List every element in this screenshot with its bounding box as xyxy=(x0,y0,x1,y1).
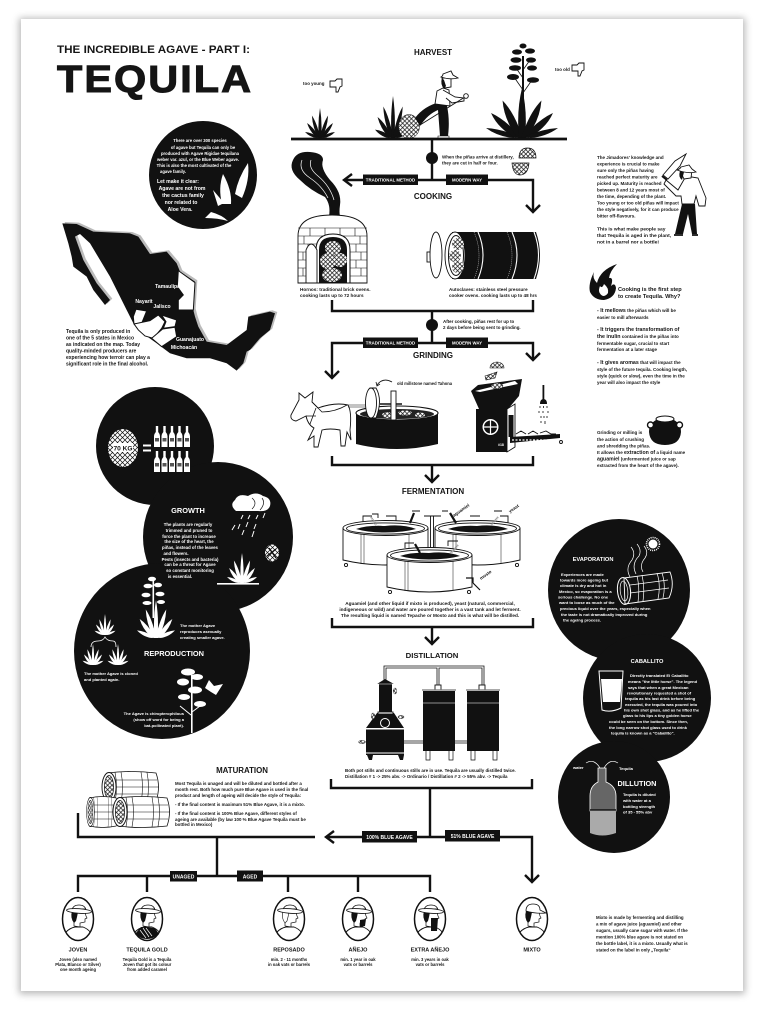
pina halves note: they are cut in half or four. xyxy=(442,160,498,166)
fermentation to distillation flow xyxy=(332,618,533,644)
growth text: Pests (insects and bacteria) xyxy=(162,557,219,562)
portrait: extra anejo xyxy=(411,898,450,967)
oven text: Hornos: traditional brick ovens. xyxy=(300,287,371,292)
jimador text: The Jimadores' knowledge and xyxy=(597,155,664,160)
harvest to cooking flow: MODERN WAY xyxy=(452,178,482,182)
panel: right circles xyxy=(548,519,711,853)
mother agave text: The mother Agave xyxy=(180,623,216,628)
growth text: and flowers. xyxy=(163,551,189,556)
grinding text: extracted from the heart of the agave). xyxy=(597,463,679,468)
caballito text: could be seen on the bottom. Since then, xyxy=(609,719,688,724)
jimador text: that Tequila is aged in the plant, xyxy=(597,233,672,239)
evaporation text: Experiences are made xyxy=(561,572,604,577)
evaporation text: precious liquid over the years, especially when xyxy=(560,606,651,611)
icon: rain cloud xyxy=(232,494,270,537)
jimador text: This is what make people say xyxy=(597,226,666,232)
cooking to grinding flow: TRADITIONAL METHOD xyxy=(366,340,415,346)
icon: shot glass xyxy=(599,671,623,711)
tank labels xyxy=(452,503,520,581)
panel: agave species circle: produced with Agave Rigidae tequilana xyxy=(161,151,240,156)
icon: young agave xyxy=(305,108,335,138)
jimador text: between 8 and 12 years most of xyxy=(597,188,665,192)
icon: donkey xyxy=(291,392,366,447)
tank labels: aguamiel xyxy=(452,503,470,518)
cloned text: and planted again. xyxy=(84,677,120,682)
growth text: can be a threat for Agave xyxy=(164,562,216,567)
portrait: tequila gold: from added caramel xyxy=(127,967,167,972)
mother agave text: creating smaller agave. xyxy=(180,635,225,640)
chiropterophilous text: bat-pollinated plant). xyxy=(144,723,184,728)
growth text: so constant monitoring xyxy=(166,568,214,573)
portrait: extra anejo: min. 3 years in oak xyxy=(411,957,449,962)
text: tequila regions: as indicated on the map. Today xyxy=(66,342,140,348)
portrait: mixto xyxy=(516,898,548,954)
resting note: After cooking, piñas rest for up to xyxy=(443,319,515,324)
too young label xyxy=(303,79,342,92)
mixto text: mention 100% blue agave is not stated on xyxy=(596,934,683,940)
cloned text: The mother Agave is cloned xyxy=(84,671,138,676)
text: tequila regions: Tequila is only produced in xyxy=(66,329,130,335)
cooking reasons: - It triggers the transformation of xyxy=(597,327,680,333)
cooking reasons: the inulin contained in the piñas into xyxy=(597,334,679,340)
portrait: anejo xyxy=(340,898,376,967)
pina halves note: When the piñas arrive at distillery, xyxy=(442,154,514,160)
icon: tahona mill xyxy=(356,380,438,449)
icon: cloned agaves xyxy=(82,614,128,665)
distillation text: Distillation # 1 -> 25% abv. -> Ordinario / Distillation # 2 -> 55% abv. -> Tequila xyxy=(345,774,508,779)
jimador text: experience is crucial to make xyxy=(597,162,660,166)
autoclave text: cooker ovens. cooking lasts up to 48 hrs xyxy=(449,293,537,298)
cooking to grinding flow: MODERN WAY xyxy=(452,340,482,346)
growth text: piñas, instead of the leaves xyxy=(162,545,219,550)
portrait: tequila gold xyxy=(123,898,172,972)
jimador text: the time, depending of the plant. xyxy=(597,194,666,199)
icon: jimador with pina xyxy=(375,71,468,139)
distillation split flow: 100% BLUE AGAVE xyxy=(366,835,413,841)
map of Mexico xyxy=(62,222,277,371)
jimador text: Too young or too old piñas will impact xyxy=(597,200,679,206)
cooking reasons: fermentation at a later stage xyxy=(597,347,658,352)
icon: autoclave xyxy=(427,232,540,279)
cooking reasons: easier to mill afterwards xyxy=(597,315,649,320)
caballito text: Directly translated El Caballito xyxy=(630,673,689,678)
too old label: too old xyxy=(555,67,570,72)
grinding text: aguamiel (unfermented juice or sap xyxy=(597,456,676,462)
maturation text: - If the final content is maximum 51% Blue Agave, it is a mixto. xyxy=(175,802,305,807)
title: TEQUILA xyxy=(57,59,251,101)
icon: water and tequila bottle: Tequila xyxy=(619,766,634,771)
map labels: Jalisco xyxy=(153,304,171,310)
panel: agave species circle: Let make it clear: xyxy=(157,179,199,185)
distillation split flow xyxy=(78,779,539,892)
icon: clay pot xyxy=(648,416,682,445)
caballito text: tequila is known as a "Caballito". xyxy=(611,730,675,736)
evaporation text: climate is dry and hot in xyxy=(560,583,607,588)
distillation split flow: AGED xyxy=(243,874,258,880)
evaporation text: want to loose as much of the xyxy=(558,600,615,605)
caballito text: tequila as his last drink before being xyxy=(625,696,696,701)
icon: mechanical shredder: #18 xyxy=(498,443,504,447)
map labels xyxy=(135,284,204,351)
icon: shower head xyxy=(539,385,548,424)
portrait: reposado xyxy=(268,898,311,967)
jimador text: sure only the piñas having xyxy=(597,168,654,173)
cooking why heading: Cooking is the first step xyxy=(618,287,682,293)
cooking reasons: fermentable sugar, crucial to start xyxy=(597,341,670,346)
icon: jimador with machete xyxy=(662,154,706,235)
jimador text: picked up. Maturity is reached xyxy=(597,181,662,186)
caballito text: the long narrow shot glass used to drink xyxy=(609,725,688,730)
panel: agave species circle: Agave are not from xyxy=(159,186,206,192)
too young label: too young xyxy=(303,81,325,86)
maturation text: ageing are available (by law 100 % Blue Agave Tequila must be xyxy=(175,817,306,822)
maturation text: month rest. Both how much pure Blue Agave is used in the final xyxy=(175,787,308,792)
mixto text: stated on the label in only „Tequila“ xyxy=(596,948,671,952)
grinding heading: GRINDING xyxy=(413,351,453,360)
oven text: cooking lasts up to 72 hours xyxy=(300,293,364,298)
resting note: 2 days before being sent to grinding. xyxy=(443,325,521,330)
panel: agave species circle: nor related to xyxy=(165,200,197,206)
icon: water and tequila bottle: water xyxy=(572,765,584,770)
dillution heading: DILLUTION xyxy=(618,779,656,788)
portrait: joven: one month ageing xyxy=(60,967,96,972)
grinding text: and shredding the piñas. xyxy=(597,444,650,448)
portrait: extra anejo: EXTRA AÑEJO xyxy=(411,946,450,954)
grinding to fermentation flow xyxy=(332,456,533,482)
harvest to cooking flow: TRADITIONAL METHOD xyxy=(366,178,415,182)
evaporation heading: EVAPORATION xyxy=(573,557,613,563)
portrait: tequila gold: Joven that got its colour xyxy=(123,962,172,967)
portrait: joven: Plata, Blanco or Silver) xyxy=(55,962,101,967)
grinding text: Grinding or milling is xyxy=(597,430,643,435)
evaporation text: serious challenge. No one xyxy=(558,594,609,600)
portrait: tequila gold: Tequila Gold is a Tequila xyxy=(123,957,172,962)
text: tequila regions: quality-minded producers are xyxy=(66,348,137,354)
autoclave text: Autoclaves: stainless steel pressure xyxy=(449,287,528,292)
caballito heading: CABALLITO xyxy=(631,659,664,665)
caballito text: executed, the tequila was poured into xyxy=(625,702,698,707)
cooking reasons: style (quick or slow), even the time in the xyxy=(597,374,685,378)
tahona label: old millstone named Tahona xyxy=(397,381,453,386)
distillation heading: DISTILLATION xyxy=(406,651,459,660)
portrait: joven: Joven (also named xyxy=(59,957,97,962)
map labels: Guanajuato xyxy=(176,337,204,343)
portrait: extra anejo: vats or barrels xyxy=(416,962,445,967)
fermentation text: indigeneous or wild) and water are poured together is a vast tank and let ferment. xyxy=(339,607,521,612)
harvest heading: HARVEST xyxy=(414,48,452,57)
icon: agave leaves xyxy=(205,163,248,221)
icon: mechanical shredder xyxy=(471,362,562,452)
map labels: Michoacán xyxy=(171,345,197,351)
caballito text: revolutionary requested a shot of xyxy=(627,690,692,696)
panel: agave species circle xyxy=(149,121,257,229)
chiropterophilous text: The Agave is chiropterophilous xyxy=(124,711,185,716)
text: tequila regions: significant role in the final alcohol. xyxy=(66,362,149,368)
distillation split flow: 51% BLUE AGAVE xyxy=(451,834,495,840)
icon: old agave with stalk xyxy=(486,44,558,138)
growth text: is essential. xyxy=(168,574,192,579)
panel: left circles xyxy=(74,387,293,739)
icon: barrel with vapours and sun xyxy=(616,538,672,605)
caballito text: means "the little horse". The legend xyxy=(628,679,698,684)
jimador text: bitter off-flavours. xyxy=(597,214,636,218)
evaporation text: the ageing process. xyxy=(563,618,601,622)
caballito text: his own shot glass, and as he lifted the xyxy=(624,708,700,712)
icon: young agave on ground xyxy=(217,553,259,585)
portrait: anejo: vats or barrels xyxy=(344,962,373,967)
mixto text: sugars, usually cane sugar with water. If the xyxy=(596,928,688,933)
growth heading: GROWTH xyxy=(171,506,205,515)
maturation text: Most Tequila is unaged and will be diluted and bottled after a xyxy=(175,781,302,786)
text: tequila regions: experiencing how terroir can play a xyxy=(66,355,150,361)
portrait: anejo: min. 1 year in oak xyxy=(340,957,376,962)
tank labels: mosto xyxy=(479,569,493,581)
portrait: anejo: AÑEJO xyxy=(349,946,368,954)
cooking reasons: - It mellows the piñas which will be xyxy=(597,308,676,314)
distillation text: Both pot stills and continuous stills are in use. Tequila are usually distilled twice. xyxy=(345,768,516,773)
evaporation text: towards more ageing but xyxy=(560,578,609,582)
icon: beetle xyxy=(265,544,279,562)
growth text: the size of the heart, the xyxy=(164,539,214,544)
panel: agave species circle: weber var. azul, or the Blue Weber agave. xyxy=(156,157,239,162)
dillution text: bottling strength xyxy=(623,804,656,809)
portrait: joven: JOVEN xyxy=(69,948,87,954)
reproduction heading: REPRODUCTION xyxy=(144,649,204,658)
portrait: reposado: REPOSADO xyxy=(273,948,305,954)
panel: agave species circle: of agave but Tequila can only be xyxy=(171,145,236,150)
too old label xyxy=(555,63,584,76)
dillution text: of 35 - 55% abv xyxy=(623,810,653,814)
maturation text: - If the final content is 100% Blue Agave, different styles of xyxy=(175,811,297,816)
cooking to grinding flow xyxy=(325,300,540,378)
fermentation text: The resulting liquid is named Tepache or Mosto and this is what will be distilled. xyxy=(341,613,519,618)
growth text: trimmed and pruned to xyxy=(166,528,213,533)
harvest to cooking flow xyxy=(291,139,567,212)
cooking reasons: style of the future tequila. Cooking length, xyxy=(597,367,687,372)
cooking reasons: - It gives aromas that will impact the xyxy=(597,360,681,366)
jimador text: reached perfect maturity are xyxy=(597,174,658,180)
jimador text: not in a barrel nor a bottle! xyxy=(597,240,659,246)
maturation heading: MATURATION xyxy=(216,766,268,775)
fermentation text: Aguamiel (and other liquid if mixto is produced), yeast (natural, commercial, xyxy=(345,601,515,606)
icon: stills xyxy=(358,667,500,760)
fermentation heading: FERMENTATION xyxy=(402,487,464,496)
grinding text: the action of crushing xyxy=(597,437,644,442)
pina halves note xyxy=(442,148,536,175)
portrait: reposado: min. 2 - 11 months xyxy=(271,957,308,962)
portrait: joven xyxy=(55,898,101,972)
panel: agave species circle: This is also the most cultivated of the xyxy=(157,163,232,168)
text: tequila regions: one of the 5 states in Mexico xyxy=(66,336,134,342)
portrait: reposado: in oak vats or barrels xyxy=(268,962,311,967)
portrait: mixto: MIXTO xyxy=(523,948,541,954)
distillation split flow: UNAGED xyxy=(173,874,195,880)
growth text: force the plant to increase xyxy=(162,534,216,539)
jimador text: the style negatively, for it can produce xyxy=(597,207,679,212)
tank labels: yeast xyxy=(508,503,520,514)
icon: flowering agave xyxy=(137,577,175,638)
map labels: Nayarit xyxy=(135,299,153,305)
chiropterophilous text: (show off word for being a xyxy=(133,717,185,722)
grinding text: It allows the extraction of a liquid name xyxy=(597,450,685,456)
icon: 70kg pina equals bottles xyxy=(108,426,190,472)
dillution text: Tequila is diluted xyxy=(623,792,656,797)
cooking why heading: to create Tequila. Why? xyxy=(618,294,681,300)
mixto text: a mix of agave juice (aguamiel) and other xyxy=(596,922,682,926)
evaporation text: Mexico, so evaporation is a xyxy=(559,589,612,594)
icon: 70kg pina equals bottles: 70 KG xyxy=(113,446,133,452)
icon: brick oven xyxy=(292,152,367,283)
icon: water and tequila bottle xyxy=(572,761,634,836)
cooking heading: COOKING xyxy=(414,192,452,201)
maturation text: bottled in Mexico) xyxy=(175,822,213,827)
panel: agave species circle: There are over 300 species xyxy=(173,138,227,143)
cooking reasons: year will also impact the style xyxy=(597,380,661,385)
mixto text: Mixto is made by fermenting and distilling xyxy=(596,915,684,920)
maturation text: product and length of ageing will decide the style of Tequila: xyxy=(175,793,302,798)
dillution text: with water at a xyxy=(622,798,652,803)
caballito text: glass to his lips a tiny golden horse xyxy=(623,713,692,718)
icon: flame xyxy=(590,264,617,300)
mother agave text: reproduces asexually xyxy=(180,629,222,634)
icon: fermentation tanks xyxy=(343,511,520,594)
icon: barrels xyxy=(87,772,170,828)
panel: agave species circle: the cactus family xyxy=(162,193,204,199)
mixto text: the bottle label, it is a mixto. Usually what is xyxy=(596,941,688,946)
growth text: The plants are regularly xyxy=(164,522,213,527)
portrait: tequila gold: TEQUILA GOLD xyxy=(126,948,168,954)
panel: agave species circle: Aloe Vera. xyxy=(168,207,193,213)
caballito text: says that when a great Mexican xyxy=(628,685,689,690)
icon: flowering stem with bat xyxy=(177,668,223,733)
title: THE INCREDIBLE AGAVE - PART I: xyxy=(57,44,250,56)
panel: agave species circle: agave family. xyxy=(160,169,186,174)
evaporation text: the taste is not dramatically improved during xyxy=(561,612,648,617)
map labels: Tamaulipas xyxy=(155,284,183,290)
